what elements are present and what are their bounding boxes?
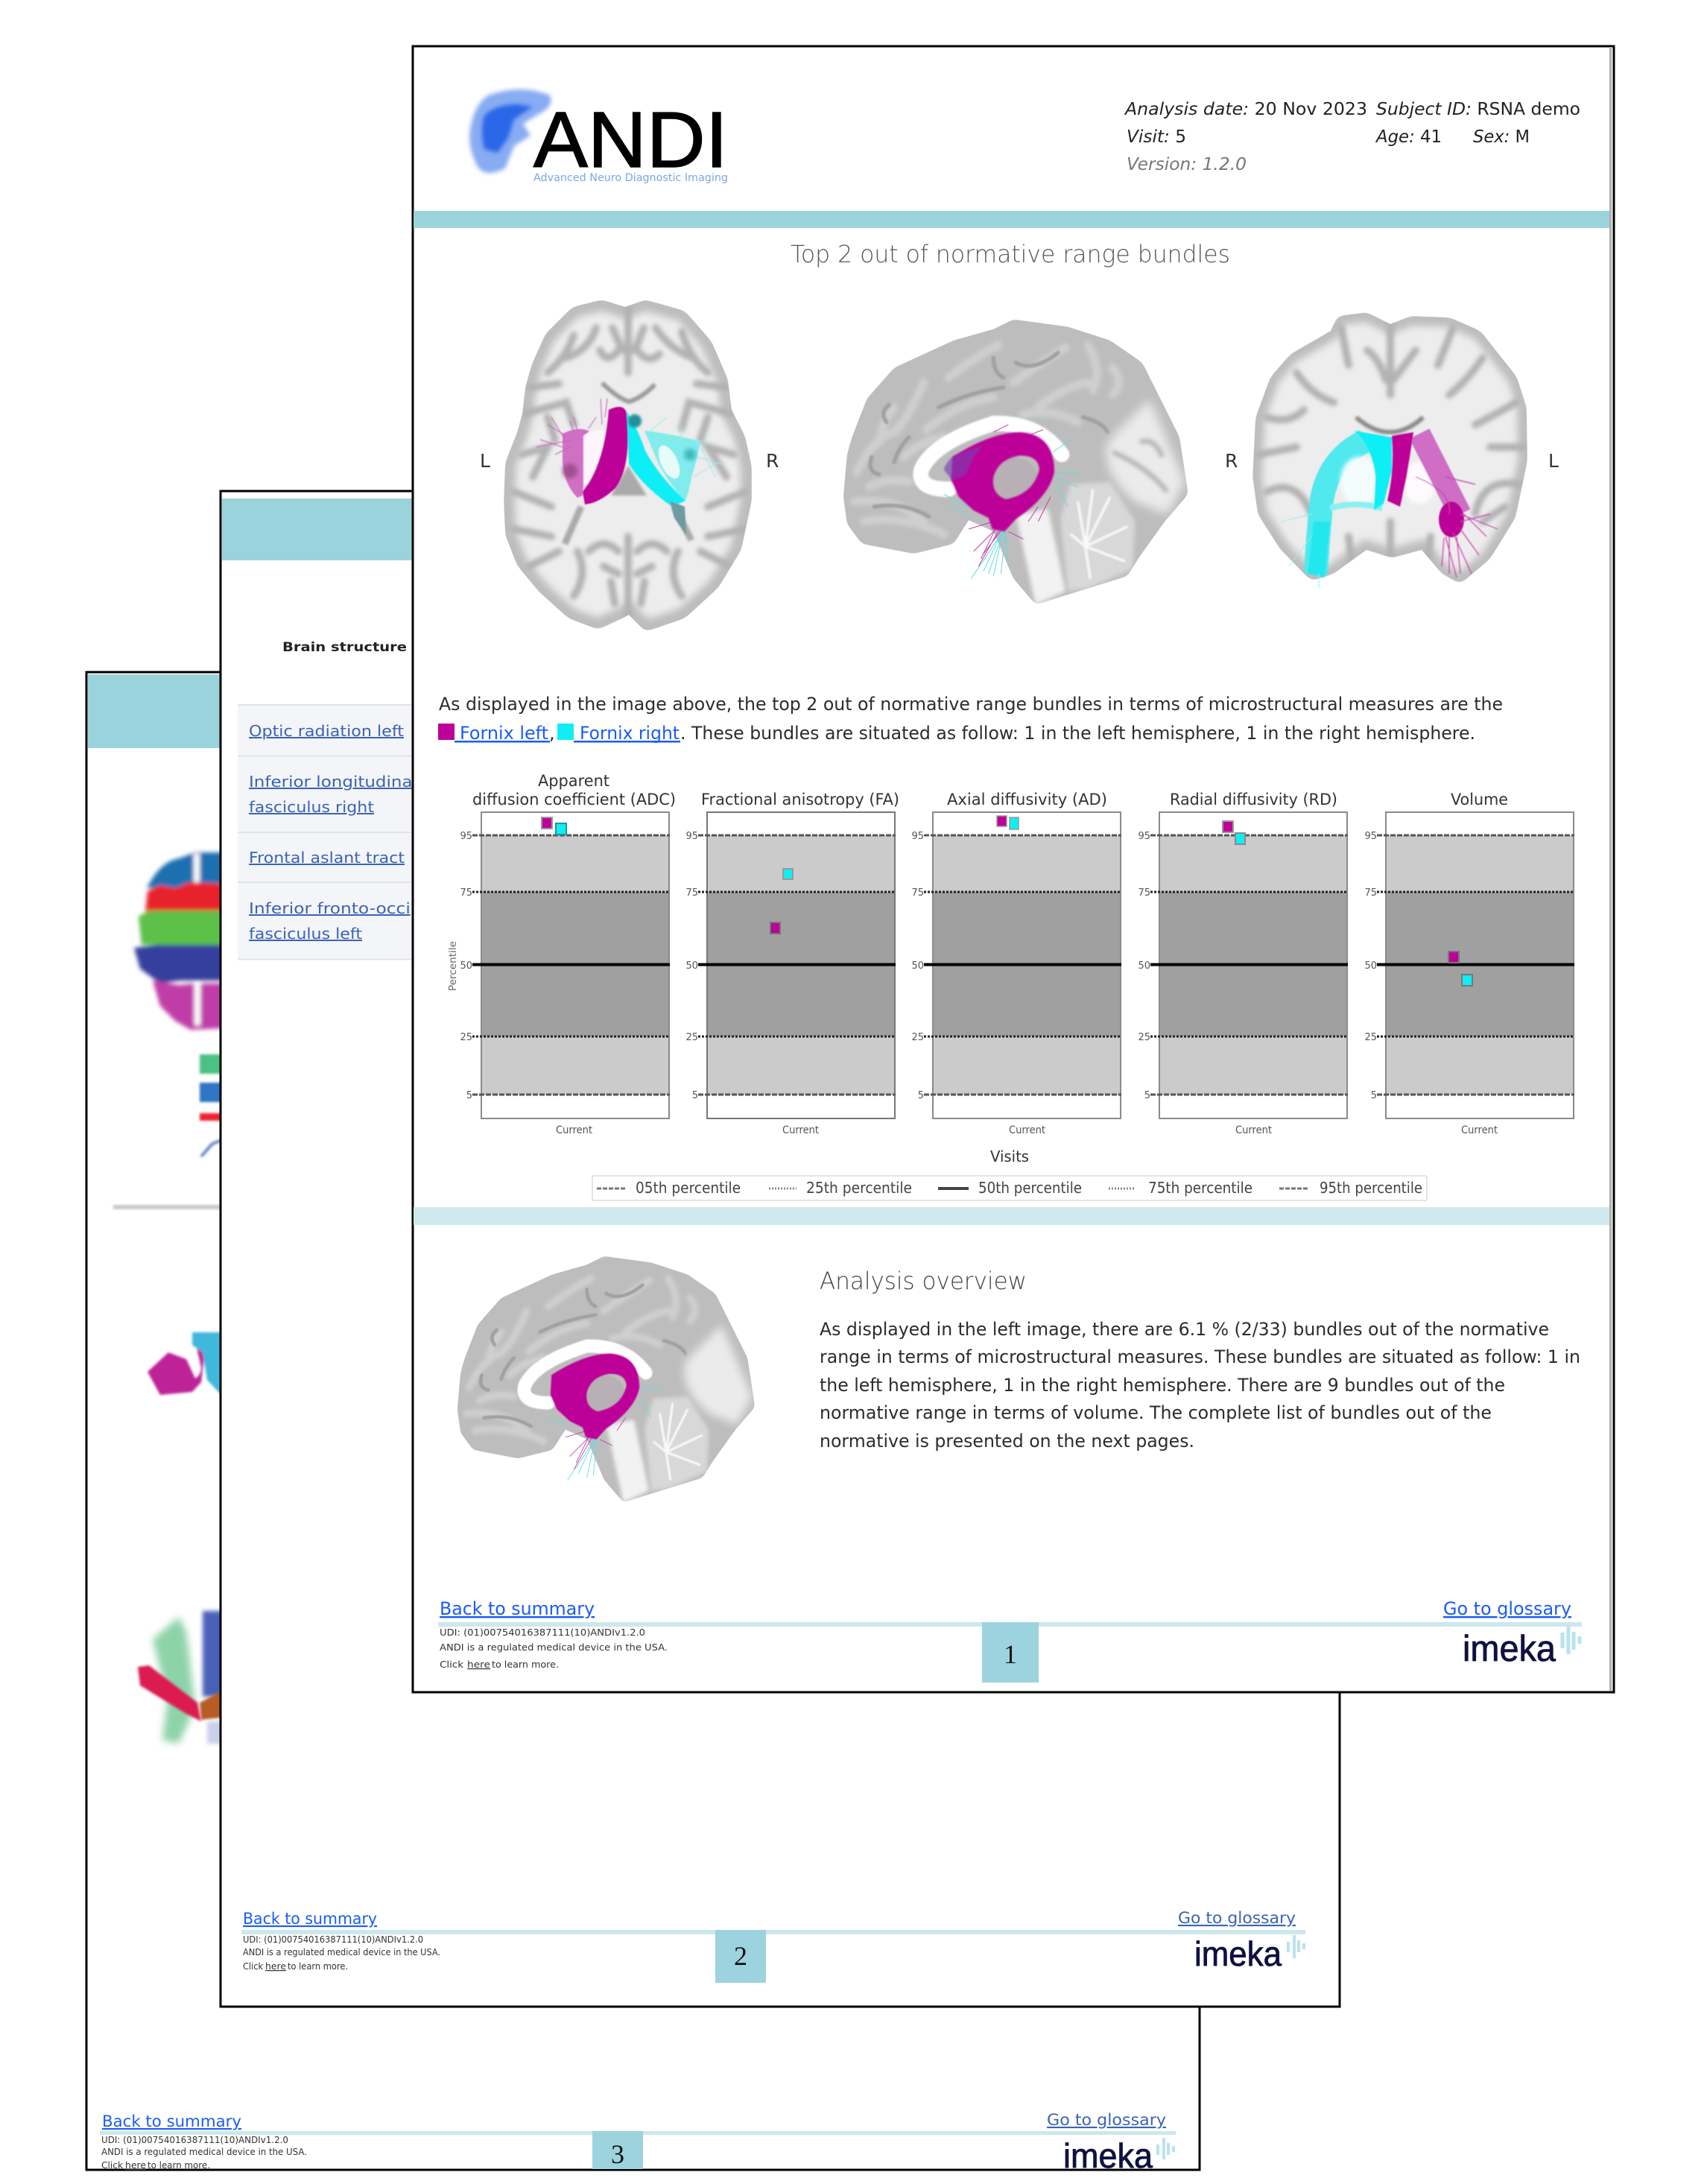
regulatory text <box>101 2135 307 2171</box>
chart: ADC: 95 <box>460 831 472 842</box>
fornix bundles sagittal <box>944 425 1083 579</box>
chart: ADC: 50 <box>460 960 472 972</box>
x axis label: Visits <box>990 1148 1029 1165</box>
regulatory text: ANDI is a regulated medical device in the USA. <box>440 1642 668 1653</box>
fornix left bundle <box>536 399 628 504</box>
chart: AD: Current <box>1009 1124 1045 1136</box>
y axis label: Percentile <box>448 941 459 991</box>
table of brain structures: Inferior longitudinal <box>249 773 417 791</box>
chart: Volume: 50 <box>1364 960 1377 972</box>
legend entry 95th: 95th percentile <box>1320 1179 1422 1197</box>
page number <box>715 1930 766 1983</box>
glossary link: Go to glossary <box>1047 2111 1166 2129</box>
regulatory text <box>243 1934 440 1972</box>
fornix right bundle <box>627 411 726 535</box>
regulatory text: ANDI is a regulated medical device in the USA. <box>101 2147 307 2157</box>
chart: ADC: 75 <box>460 887 472 899</box>
analysis overview paragraph: As displayed in the left image, there are 6.1 % (2/33) bundles out of the normative <box>820 1319 1549 1340</box>
chart: AD: 95 <box>911 831 924 842</box>
heading: analysis overview: Analysis overview <box>820 1267 1027 1295</box>
panel: report page 1 (front) <box>413 46 1614 1692</box>
table of brain structures: Frontal aslant tract <box>249 849 405 867</box>
colour legend bars <box>200 1054 222 1156</box>
chart: FA <box>685 791 899 1136</box>
magenta and cyan tract thumbnail <box>148 1332 224 1397</box>
analysis overview paragraph <box>820 1319 1580 1452</box>
icon: blue brain brush <box>469 89 551 173</box>
regulatory text: Click <box>243 1961 263 1972</box>
orientation label L: L <box>480 450 490 472</box>
swatch: fornix right <box>557 724 574 740</box>
sagittal brain tissue <box>840 315 1192 609</box>
chart: FA: 95 <box>685 831 698 842</box>
chart: RD <box>1138 791 1348 1136</box>
chart: Volume: 5 <box>1371 1090 1377 1101</box>
imeka logo: imeka <box>1063 2136 1153 2175</box>
description paragraph: , <box>549 723 555 744</box>
regulatory text: here <box>265 1961 286 1972</box>
back link: Back to summary <box>102 2112 241 2130</box>
description paragraph <box>438 694 1503 744</box>
axial brain view <box>504 300 752 630</box>
description paragraph: As displayed in the image above, the top 2 out of normative range bundles in terms of microstructural measures are the <box>439 694 1503 715</box>
rainbow bundle brain map <box>134 852 224 1030</box>
heading: top bundles: Top 2 out of normative range bundles <box>791 240 1230 268</box>
page number <box>982 1622 1039 1683</box>
subject information: Analysis date: 20 Nov 2023 <box>1124 100 1367 119</box>
chart: RD: 5 <box>1144 1090 1150 1101</box>
header band <box>414 211 1609 228</box>
chart: ADC <box>460 772 676 1136</box>
chart: Volume: Volume <box>1451 791 1508 808</box>
chart: ADC: 5 <box>466 1090 472 1101</box>
chart: FA: Fractional anisotropy (FA) <box>701 791 899 808</box>
chart: Volume: Current <box>1461 1124 1498 1136</box>
page 2 header band <box>222 498 413 560</box>
legend entry 05th: 05th percentile <box>636 1179 741 1197</box>
chart: ADC: 25 <box>460 1032 472 1043</box>
table heading: Brain structure <box>282 640 407 655</box>
analysis overview paragraph: normative range in terms of volume. The complete list of bundles out of the <box>820 1402 1492 1423</box>
chart: AD: 25 <box>911 1032 924 1043</box>
subject information: Sex: M <box>1473 127 1530 147</box>
chart: FA: 75 <box>685 887 698 899</box>
glossary link: Go to glossary <box>1178 1909 1296 1927</box>
regulatory text <box>440 1627 668 1670</box>
subject information <box>1124 100 1580 174</box>
link: fornix left: Fornix left <box>460 723 548 744</box>
table of brain structures: fasciculus left <box>249 925 362 943</box>
subject information: Version: 1.2.0 <box>1127 155 1247 174</box>
chart: ADC: Apparent <box>538 772 609 790</box>
chart: Volume: 75 <box>1364 887 1377 899</box>
analysis overview paragraph: normative is presented on the next pages. <box>820 1431 1194 1452</box>
chart: RD: Current <box>1235 1124 1272 1136</box>
chart: FA: 5 <box>692 1090 698 1101</box>
orientation label R coronal: R <box>1225 450 1238 472</box>
chart: AD: Axial diffusivity (AD) <box>947 791 1107 808</box>
chart: FA: 25 <box>685 1032 698 1043</box>
green red orange tract thumbnail <box>138 1611 225 1744</box>
chart: RD: 75 <box>1138 887 1150 899</box>
imeka logo: imeka <box>1463 1629 1556 1669</box>
ANDI logo <box>469 89 728 184</box>
table of brain structures <box>238 705 449 960</box>
link: fornix right: Fornix right <box>580 723 680 744</box>
regulatory text: to learn more. <box>288 1961 348 1972</box>
regulatory text: UDI: (01)00754016387111(10)ANDIv1.2.0 <box>440 1627 645 1638</box>
back link: Back to summary <box>440 1598 595 1619</box>
regulatory text: ANDI is a regulated medical device in the USA. <box>243 1947 440 1957</box>
chart: FA: Current <box>782 1124 819 1136</box>
analysis overview paragraph: the left hemisphere, 1 in the right hemisphere. There are 9 bundles out of the <box>820 1375 1505 1396</box>
regulatory text: here <box>125 2160 146 2171</box>
legend entry 50th: 50th percentile <box>978 1179 1082 1197</box>
subject information: Visit: 5 <box>1127 127 1186 147</box>
chart: Volume: 95 <box>1364 831 1377 842</box>
legend entry 75th: 75th percentile <box>1148 1179 1252 1197</box>
chart: AD: 50 <box>911 960 924 972</box>
chart: ADC: diffusion coefficient (ADC) <box>472 791 676 808</box>
regulatory text: UDI: (01)00754016387111(10)ANDIv1.2.0 <box>243 1934 423 1945</box>
page number: 1 <box>1004 1639 1017 1669</box>
chart: ADC: Current <box>556 1124 592 1136</box>
grey divider <box>113 1205 225 1209</box>
table of brain structures: Optic radiation left <box>249 722 404 740</box>
glossary link: Go to glossary <box>1443 1598 1571 1619</box>
page number <box>592 2131 643 2169</box>
panel: report page 3 (back) <box>86 672 1200 2175</box>
footer rule <box>438 1622 1582 1627</box>
divider band <box>414 1207 1609 1225</box>
chart: RD: 95 <box>1138 831 1150 842</box>
chart: RD: Radial diffusivity (RD) <box>1170 791 1337 808</box>
legend <box>592 1176 1427 1200</box>
description paragraph: These bundles are situated as follow: 1 in the left hemisphere, 1 in the right hemisphere. <box>691 723 1475 744</box>
chart: AD: 5 <box>918 1090 924 1101</box>
page 2 footer <box>241 1909 1305 1983</box>
analysis overview brain image <box>454 1253 759 1506</box>
analysis overview paragraph: range in terms of microstructural measures. These bundles are situated as follow: 1 in <box>820 1346 1580 1367</box>
page 3 footer <box>100 2111 1176 2175</box>
chart: AD: 75 <box>911 887 924 899</box>
fornix right bundle coronal <box>1282 431 1392 589</box>
chart: AD <box>911 791 1121 1136</box>
chart: FA: 50 <box>685 960 698 972</box>
regulatory text: Click <box>101 2160 123 2171</box>
sagittal brain view <box>840 315 1192 609</box>
imeka logo: imeka <box>1194 1934 1282 1973</box>
chart: Volume: 25 <box>1364 1032 1377 1043</box>
regulatory text: to learn more. <box>148 2160 210 2171</box>
subject information: Subject ID: RSNA demo <box>1376 100 1580 119</box>
logo tagline: Advanced Neuro Diagnostic Imaging <box>533 172 728 184</box>
page 3 header band <box>88 674 221 748</box>
page number: 3 <box>611 2139 624 2169</box>
chart: Volume <box>1364 791 1574 1136</box>
coronal brain view <box>1244 306 1542 589</box>
logo wordmark: ANDI <box>533 96 728 184</box>
swatch: fornix left <box>438 724 455 740</box>
regulatory text: UDI: (01)00754016387111(10)ANDIv1.2.0 <box>101 2135 288 2145</box>
page 1 footer <box>438 1598 1582 1683</box>
panel: report page 2 (middle) <box>221 491 1340 2007</box>
legend entry 25th: 25th percentile <box>806 1179 912 1197</box>
footer rule <box>100 2131 1176 2135</box>
subject information: Age: 41 <box>1375 127 1442 147</box>
footer rule <box>241 1930 1305 1934</box>
percentile charts <box>448 772 1574 1200</box>
orientation label L coronal: L <box>1548 450 1559 472</box>
page 3 brain thumbnails, partly hidden <box>113 852 225 1744</box>
page number: 2 <box>734 1941 747 1971</box>
chart: RD: 50 <box>1138 960 1150 972</box>
back link: Back to summary <box>243 1910 377 1928</box>
orientation label R: R <box>766 450 779 472</box>
table of brain structures: Inferior fronto-occipital <box>249 899 449 917</box>
description paragraph: . <box>680 723 686 744</box>
fornix left bundle coronal <box>1387 432 1498 577</box>
regulatory text: to learn more. <box>492 1659 559 1670</box>
regulatory text: Click <box>440 1659 463 1670</box>
table of brain structures: fasciculus right <box>249 798 374 816</box>
chart: RD: 25 <box>1138 1032 1150 1043</box>
regulatory text: here <box>467 1659 490 1670</box>
